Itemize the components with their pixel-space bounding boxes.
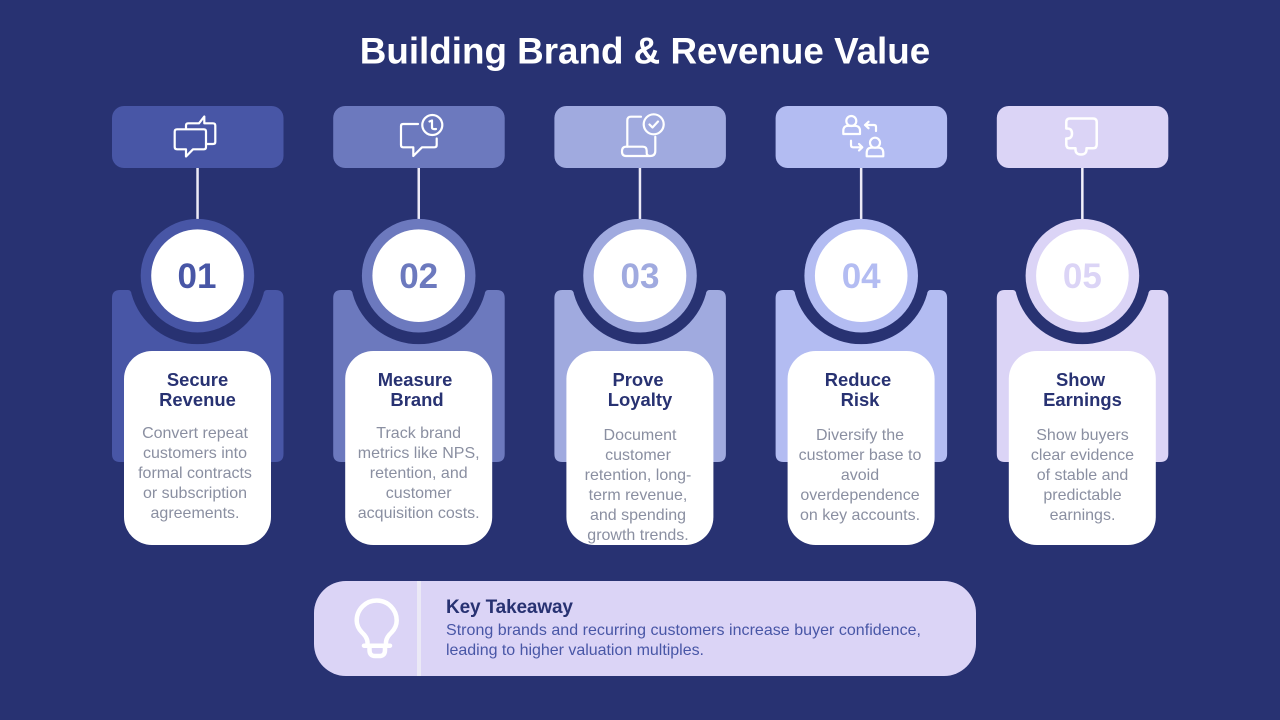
card 05: of stable and [1037, 467, 1128, 484]
icon box 05 [997, 106, 1168, 168]
card 01: agreements. [151, 505, 239, 522]
icon: light bulb [357, 600, 397, 656]
lower panel 03 [554, 290, 726, 462]
card 04: overdependence [800, 487, 920, 504]
card 05 [1009, 351, 1156, 545]
card 02 [345, 351, 492, 545]
card 01: Revenue [159, 389, 236, 410]
takeaway text [446, 622, 921, 659]
card 03: retention, long- [585, 467, 691, 484]
lower panel 05 [997, 290, 1168, 462]
icon: people swapping [843, 116, 883, 156]
card 02: acquisition costs. [358, 505, 480, 522]
card 02: customer [386, 485, 452, 502]
lower panel 01 [112, 290, 284, 462]
card 02: Measure [378, 369, 452, 390]
card 05: Show [1056, 369, 1106, 390]
card 03: Document [604, 427, 677, 444]
card 05: Show buyers [1036, 427, 1129, 444]
number badge 02: 02 [399, 257, 438, 296]
key takeaway banner [314, 581, 976, 676]
panel: step 01 secure revenue [112, 106, 284, 545]
icon: chat bubbles [175, 116, 215, 156]
card 03: customer [605, 447, 672, 464]
number badge 01 [141, 219, 254, 332]
takeaway heading: Key Takeaway [446, 597, 573, 618]
card 01: customers into [143, 445, 247, 462]
icon: chat with clock [401, 115, 442, 156]
icon box 01 [112, 106, 284, 168]
card 01: Secure [167, 369, 228, 390]
card 02: Track brand [376, 425, 461, 442]
panel: step 05 show earnings [997, 106, 1168, 545]
card 03: and spending [590, 507, 686, 524]
card 04: on key accounts. [800, 507, 920, 524]
lower panel 04 [776, 290, 947, 462]
connector 03 [639, 168, 641, 219]
card 03: Prove [612, 369, 664, 390]
icon: puzzle piece [1066, 118, 1097, 154]
card 05: earnings. [1050, 507, 1115, 524]
number badge 01: 01 [178, 257, 216, 296]
card 05: Earnings [1043, 389, 1122, 410]
card 03: Loyalty [608, 389, 673, 410]
connector 05 [1081, 168, 1084, 219]
card 03: growth trends. [587, 527, 689, 544]
icon box 03 [554, 106, 726, 168]
card 04 [788, 351, 935, 545]
connector 02 [418, 168, 420, 219]
card 01: Convert repeat [142, 425, 248, 442]
number badge 03: 03 [621, 257, 659, 296]
connector 01 [196, 168, 199, 219]
number badge 04: 04 [842, 257, 881, 296]
takeaway text: leading to higher valuation multiples. [446, 642, 704, 659]
card 04: avoid [841, 467, 879, 484]
card 04: Reduce [825, 369, 891, 390]
card 03: term revenue, [589, 487, 687, 504]
number badge 02 [362, 219, 476, 332]
number badge 05 [1026, 219, 1139, 332]
panel: step 02 measure brand [333, 106, 505, 545]
card 01 [124, 351, 271, 545]
lower panel 02 [333, 290, 505, 462]
card 04: customer base to [799, 447, 921, 464]
card 02: retention, and [370, 465, 468, 482]
title: Building Brand & Revenue Value [360, 30, 930, 72]
card 04: Risk [841, 389, 880, 410]
icon: document with check [622, 114, 664, 156]
number badge 05: 05 [1063, 257, 1102, 296]
panel: step 04 reduce risk [776, 106, 947, 545]
number badge 03 [583, 219, 697, 332]
number badge 04 [804, 219, 918, 332]
icon box 02 [333, 106, 505, 168]
icon box 04 [776, 106, 947, 168]
connector 04 [860, 168, 862, 219]
card 01: or subscription [143, 485, 247, 502]
card 02: Brand [390, 389, 444, 410]
card 02: metrics like NPS, [358, 445, 480, 462]
card 05: clear evidence [1031, 447, 1134, 464]
card 03 [566, 351, 713, 545]
card 05: predictable [1043, 487, 1122, 504]
card 04: Diversify the [816, 427, 904, 444]
panel: step 03 prove loyalty [554, 106, 726, 545]
takeaway text: Strong brands and recurring customers increase buyer confidence, [446, 622, 921, 639]
card 01: formal contracts [138, 465, 252, 482]
